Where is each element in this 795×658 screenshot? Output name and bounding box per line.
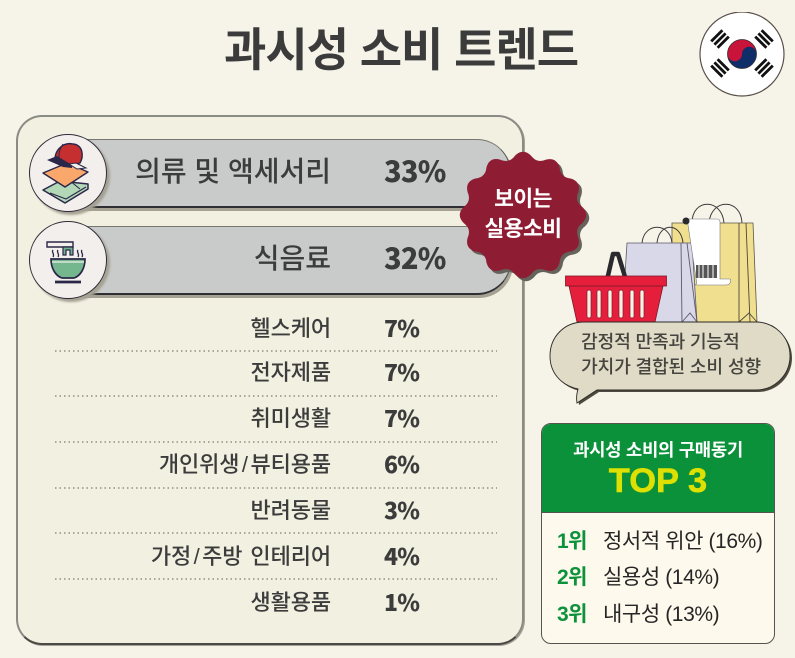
value: interior 4%: 4% (384, 538, 419, 572)
value: food 32%: 32% (384, 236, 446, 278)
speech bubble: emotional satisfaction and function: 감정적 만족과 기능적 (581, 332, 740, 352)
label: hobbies: 취미생활 (250, 406, 331, 431)
bar: clothing (68, 139, 511, 208)
label: home and kitchen interior: 가정/주방 인테리어 (151, 544, 331, 569)
icon: soup bowl (29, 221, 107, 299)
rank 1: 1위 (557, 530, 587, 553)
value: clothing 33%: 33% (384, 149, 446, 191)
speech bubble: emotional satisfaction and function: 가치가 결합된 소비 성향 (581, 356, 761, 376)
value: electronics 7%: 7% (384, 354, 419, 388)
label: pets: 반려동물 (250, 498, 331, 523)
title: 과시성 소비 트렌드 (224, 24, 578, 76)
label: healthcare: 헬스케어 (250, 316, 331, 341)
value: hobbies 7%: 7% (384, 400, 419, 434)
value: hygiene 6%: 6% (384, 446, 419, 480)
rank 3: 3위 (557, 603, 587, 626)
speech bubble: emotional satisfaction and function (550, 322, 792, 405)
icon: South Korean flag (699, 12, 785, 97)
motive 3: 내구성 (13%) (603, 603, 719, 626)
bar: food and beverage (68, 226, 511, 295)
panel header (542, 424, 774, 513)
panel: spending categories (16, 115, 524, 645)
illustration: shopping bags and basket (565, 204, 758, 322)
label: household goods: 생활용품 (250, 590, 331, 615)
value: healthcare 7%: 7% (384, 310, 419, 344)
header caption: 과시성 소비의 구매동기 (573, 440, 743, 460)
value: household 1%: 1% (384, 584, 419, 618)
panel: top 3 purchase motives (541, 423, 775, 644)
header TOP 3: TOP 3 (609, 462, 707, 500)
motive 1: 정서적 위안 (16%) (603, 530, 762, 553)
label: food and beverage: 식음료 (254, 243, 331, 274)
label: electronics: 전자제품 (250, 360, 331, 385)
motive 2: 실용성 (14%) (603, 566, 719, 589)
label: clothing and accessories: 의류 및 액세서리 (135, 156, 331, 187)
badge: visible practical consumption: 실용소비 (484, 217, 562, 241)
badge: visible practical consumption (460, 152, 590, 282)
value: pets 3%: 3% (384, 492, 419, 526)
icon: clothing and cap (29, 134, 107, 212)
badge: visible practical consumption: 보이는 (494, 187, 552, 211)
rank 2: 2위 (557, 566, 587, 589)
label: personal hygiene and beauty: 개인위생/뷰티용품 (159, 452, 331, 477)
